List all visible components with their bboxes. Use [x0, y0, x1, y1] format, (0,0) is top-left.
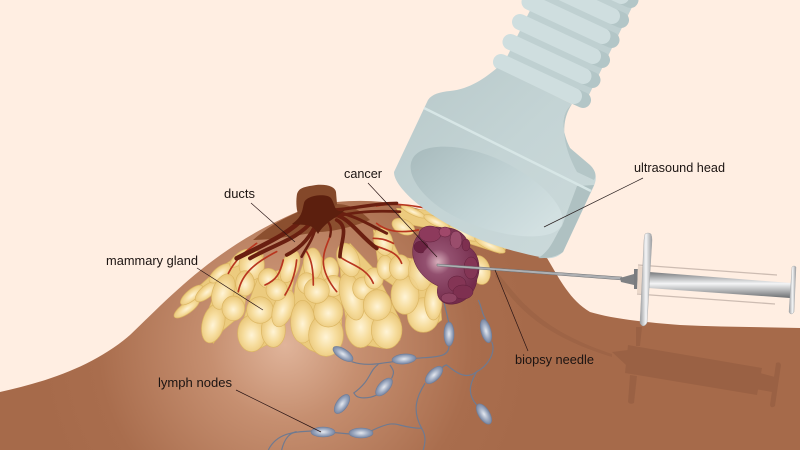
syringe shadow: [495, 272, 781, 407]
needle: [437, 264, 622, 280]
syringe: [437, 233, 796, 326]
ultrasound probe: [394, 0, 638, 258]
label: mammary gland: [106, 254, 263, 310]
label: lymph nodes: [158, 376, 321, 432]
label: lymph nodes: lymph nodes: [158, 376, 232, 390]
label: biopsy needle: [495, 270, 594, 367]
neck ribs: [501, 0, 638, 105]
label: ultrasound head: ultrasound head: [634, 161, 725, 175]
breast and torso: [0, 201, 800, 450]
ducts: [228, 203, 427, 295]
lymph vessels: [268, 300, 493, 450]
areola: [253, 204, 370, 240]
needle hub: [620, 274, 634, 285]
finger flange: [640, 233, 652, 326]
barrel: [637, 265, 777, 304]
label: cancer: cancer: [344, 167, 382, 181]
cancer tumor: [413, 226, 479, 304]
label: cancer: [344, 167, 437, 257]
head seam: [424, 108, 591, 191]
label: ultrasound head: [544, 161, 725, 227]
label: ducts: [224, 187, 295, 242]
nipple: [292, 185, 345, 234]
probe face: [411, 147, 563, 236]
plunger end: [789, 266, 796, 314]
side shading: [563, 104, 595, 180]
label: ducts: ducts: [224, 187, 255, 201]
head body: [394, 68, 596, 258]
plunger: [648, 272, 791, 298]
lymph nodes: [311, 318, 495, 438]
label: biopsy needle: biopsy needle: [515, 353, 594, 367]
label: mammary gland: mammary gland: [106, 254, 198, 268]
mammary gland lobes: [171, 203, 507, 357]
